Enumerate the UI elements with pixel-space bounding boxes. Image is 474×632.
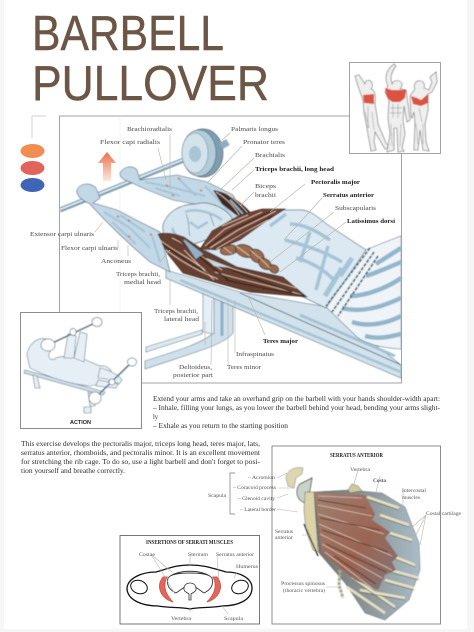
panel heading: SERRATUS ANTERIOR xyxy=(330,453,384,459)
action barbell xyxy=(41,318,136,404)
serratus labels: Serratus xyxy=(275,529,293,535)
scapula xyxy=(286,467,318,556)
insertion leader lines xyxy=(152,556,237,614)
muscle labels: Anconeus xyxy=(101,258,131,265)
muscle labels: medial head xyxy=(124,279,162,286)
muscle labels: Teres minor xyxy=(227,364,262,371)
muscle labels: Pronator teres xyxy=(243,139,285,146)
muscle labels: Teres major xyxy=(263,338,298,345)
serratus labels: – Acromion xyxy=(247,475,275,481)
muscle labels: Brachialis xyxy=(255,152,285,159)
serratus labels xyxy=(208,467,462,594)
cross-section arms xyxy=(129,578,250,596)
panel heading: INSERTIONS OF SERRATI MUSCLES xyxy=(146,540,233,546)
description paragraph: This exercise develops the pectoralis major, triceps long head, teres major, lats, xyxy=(21,440,260,448)
spine xyxy=(339,570,343,598)
scapula bracket xyxy=(230,473,235,514)
cross-section labels: Scapula xyxy=(224,616,244,622)
ribs and sternum xyxy=(167,571,213,593)
cross-section labels: Humerus xyxy=(236,564,258,570)
serratus labels: – Lateral border xyxy=(239,507,276,513)
figure right xyxy=(410,72,437,151)
exercise instructions: – Inhale, filling your lungs, as you lower the barbell behind your head, bending your arms slight- xyxy=(152,404,441,412)
muscle labels: Infraspinatus xyxy=(236,351,274,358)
near arm xyxy=(77,184,170,272)
near triceps and teres xyxy=(158,233,307,297)
serratus muscle xyxy=(314,492,398,590)
muscle labels: brachii xyxy=(255,192,276,199)
serratus labels: (thoracic vertebra) xyxy=(283,587,325,594)
pectoralis band xyxy=(200,209,285,250)
description paragraph xyxy=(21,440,261,475)
inset: muscles worked figures xyxy=(350,62,440,154)
title xyxy=(32,7,269,111)
muscle labels: Palmaris longus xyxy=(231,126,278,133)
muscle labels: Brachioradialis xyxy=(127,126,172,133)
far arm xyxy=(120,167,246,222)
cross-section labels: Sternum xyxy=(188,552,209,558)
serratus insertions xyxy=(160,577,220,602)
muscle labels: Flexor carpi ulnaris xyxy=(61,245,118,252)
inset: action drawing xyxy=(20,312,142,428)
cross-section labels: Costae xyxy=(139,552,156,558)
cross-section body outline xyxy=(127,565,252,609)
muscle labels: Subscapularis xyxy=(335,205,376,212)
muscle labels: Deltoideus, xyxy=(179,364,212,371)
serratus labels: – Glenoid cavity xyxy=(237,496,275,502)
striped shorts xyxy=(326,236,401,349)
exercise instructions: – Exhale as you return to the starting position xyxy=(152,422,288,430)
muscle labels: Extensor carpi ulnaris xyxy=(30,231,94,238)
cross-section labels: Serratus anterior xyxy=(216,552,254,558)
title: PULLOVER xyxy=(32,57,269,111)
vertebra top xyxy=(348,484,362,493)
muscle labels: Triceps brachii, xyxy=(154,308,198,315)
panel: serratus anterior xyxy=(208,446,462,624)
muscle labels: Biceps xyxy=(255,183,276,190)
action caption: ACTION xyxy=(70,420,91,426)
belt xyxy=(326,248,378,316)
leader lines xyxy=(95,133,346,365)
serratus labels: – Coracoid process xyxy=(232,485,276,491)
exercise instructions: ly xyxy=(153,413,158,421)
figure left xyxy=(355,75,389,151)
description paragraph: for stretching the rib cage. To do so, use a light barbell and don't forget to posi- xyxy=(21,458,261,466)
muscle labels: Latissimus dorsi xyxy=(347,218,395,225)
muscle labels: Serratus anterior xyxy=(323,192,374,199)
exercise instructions xyxy=(152,395,441,430)
description paragraph: tion yourself and breathe correctly. xyxy=(21,467,125,475)
muscle labels: Pectoralis major xyxy=(311,179,360,186)
panel: main illustration xyxy=(30,116,402,383)
title: BARBELL xyxy=(32,7,224,61)
muscle labels: Flexor capi radialis xyxy=(100,139,161,146)
serratus labels: Intercostal xyxy=(402,488,426,494)
serratus labels: Costa xyxy=(373,478,386,484)
muscle labels: posterior part xyxy=(173,372,213,379)
exercise instructions: Extend your arms and take an overhand grip on the barbell with your hands shoulder-width apart: xyxy=(153,395,440,403)
muscle labels: lateral head xyxy=(164,316,200,323)
figure centre xyxy=(385,64,410,152)
muscle colour legend xyxy=(20,116,46,192)
illustration art xyxy=(60,129,401,378)
serratus labels: Processus spinosus xyxy=(281,581,325,587)
muscle labels: Triceps brachii, long head xyxy=(255,166,334,173)
bench xyxy=(145,270,401,378)
cross-section labels: Vertebra xyxy=(171,616,192,622)
serratus labels: Scapula xyxy=(208,493,227,499)
torso xyxy=(205,210,366,308)
cross-section labels xyxy=(139,552,258,622)
serratus labels: anterior xyxy=(275,535,293,541)
barbell xyxy=(60,129,228,210)
serratus labels: Vertebra xyxy=(350,467,371,473)
rib cage xyxy=(314,490,420,620)
muscle labels: Triceps brachii, xyxy=(116,271,160,278)
panel: insertions of serrati muscles xyxy=(120,536,260,624)
movement arrow xyxy=(98,152,116,181)
muscle labels xyxy=(30,126,395,379)
serratus labels: muscles xyxy=(402,495,420,501)
serratus leader lines xyxy=(277,470,426,587)
serratus labels: Costal cartilage xyxy=(426,511,462,517)
head xyxy=(163,203,232,248)
serratus lobes xyxy=(219,242,280,275)
bench and figure xyxy=(24,332,122,413)
vertebra xyxy=(184,583,196,600)
far triceps and lats xyxy=(213,190,255,222)
back muscles xyxy=(158,190,307,297)
description paragraph: serratus anterior, rhomboids, and pectoralis minor. It is an excellent movement xyxy=(21,449,260,457)
